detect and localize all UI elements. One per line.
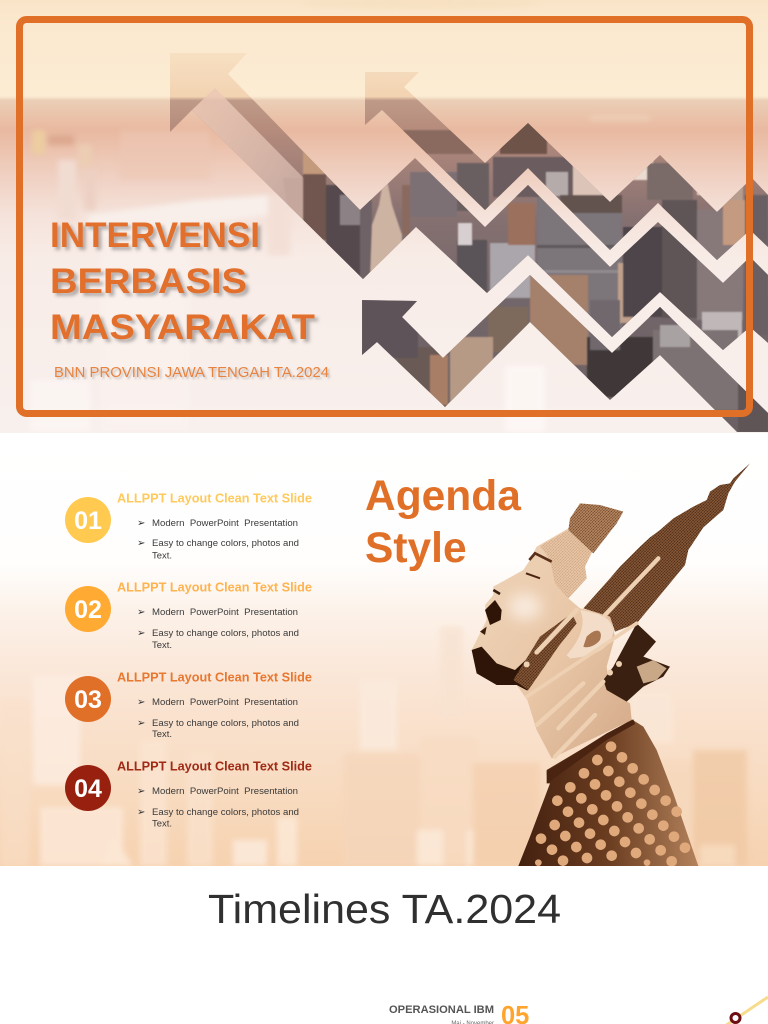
agenda item 04: 04 xyxy=(74,775,102,803)
agenda item 02: Text. xyxy=(152,640,172,650)
agenda item 04: Text. xyxy=(152,818,172,828)
panel: title slide xyxy=(0,0,768,433)
agenda item 02: ALLPPT Layout Clean Text Slide xyxy=(117,580,312,594)
agenda item 01: 01 xyxy=(74,507,102,535)
agenda heading xyxy=(365,473,521,572)
agenda item 04: ALLPPT Layout Clean Text Slide xyxy=(117,760,312,774)
agenda item 02: Easy to change colors, photos and xyxy=(152,628,299,638)
agenda item 01: ALLPPT Layout Clean Text Slide xyxy=(117,492,312,506)
subtitle: BNN PROVINSI JAWA TENGAH TA.2024 xyxy=(54,364,329,381)
timeline item 05 label: OPERASIONAL IBM xyxy=(389,1004,494,1016)
timeline item 05 label xyxy=(389,1002,529,1024)
agenda item 01: ➢ xyxy=(137,518,145,529)
heading: Intervensi Berbasis Masyarakat: MASYARAKAT xyxy=(50,308,315,347)
agenda item 03: ALLPPT Layout Clean Text Slide xyxy=(117,670,312,684)
agenda item 03: ➢ xyxy=(137,697,145,708)
timelines heading: Timelines TA.2024 xyxy=(208,886,561,932)
agenda item 04: ➢ xyxy=(137,807,145,818)
agenda item 03: Easy to change colors, photos and xyxy=(152,718,299,728)
title frame xyxy=(20,20,750,414)
agenda item 02: ➢ xyxy=(137,607,145,618)
agenda item 03: ➢ xyxy=(137,718,145,729)
agenda item 03 xyxy=(65,670,312,739)
agenda item 02: 02 xyxy=(74,596,102,624)
illustration: man in profile with skyscraper double exposure xyxy=(472,463,750,867)
agenda item 01: Text. xyxy=(152,550,172,560)
agenda heading: Style xyxy=(365,525,467,572)
agenda item 02: ➢ xyxy=(137,628,145,639)
agenda item 01 xyxy=(65,492,312,560)
agenda item 04: Easy to change colors, photos and xyxy=(152,807,299,817)
agenda heading: Agenda xyxy=(365,473,521,520)
agenda item 04: ➢ xyxy=(137,786,145,797)
agenda item 02: Modern PowerPoint Presentation xyxy=(152,607,298,617)
agenda item 01: Easy to change colors, photos and xyxy=(152,538,299,548)
panel: agenda slide xyxy=(0,433,768,867)
city background photo xyxy=(0,0,768,433)
agenda item 03: Text. xyxy=(152,729,172,739)
rising zigzag arrows filled with city photo xyxy=(170,53,768,432)
agenda item 02 xyxy=(65,580,312,650)
agenda item 03: Modern PowerPoint Presentation xyxy=(152,697,298,707)
agenda item 04: Modern PowerPoint Presentation xyxy=(152,786,298,796)
agenda item 01: Modern PowerPoint Presentation xyxy=(152,518,298,528)
heading: Intervensi Berbasis Masyarakat xyxy=(50,216,315,347)
agenda item 04 xyxy=(65,760,312,828)
heading: Intervensi Berbasis Masyarakat: BERBASIS xyxy=(50,262,247,301)
heading: Intervensi Berbasis Masyarakat: INTERVENSI xyxy=(50,216,260,255)
timeline path and marker xyxy=(722,997,768,1024)
agenda item 03: 03 xyxy=(74,686,102,714)
panel: timelines slide xyxy=(0,866,768,1024)
agenda item 01: ➢ xyxy=(137,538,145,549)
agenda background city xyxy=(0,433,768,866)
